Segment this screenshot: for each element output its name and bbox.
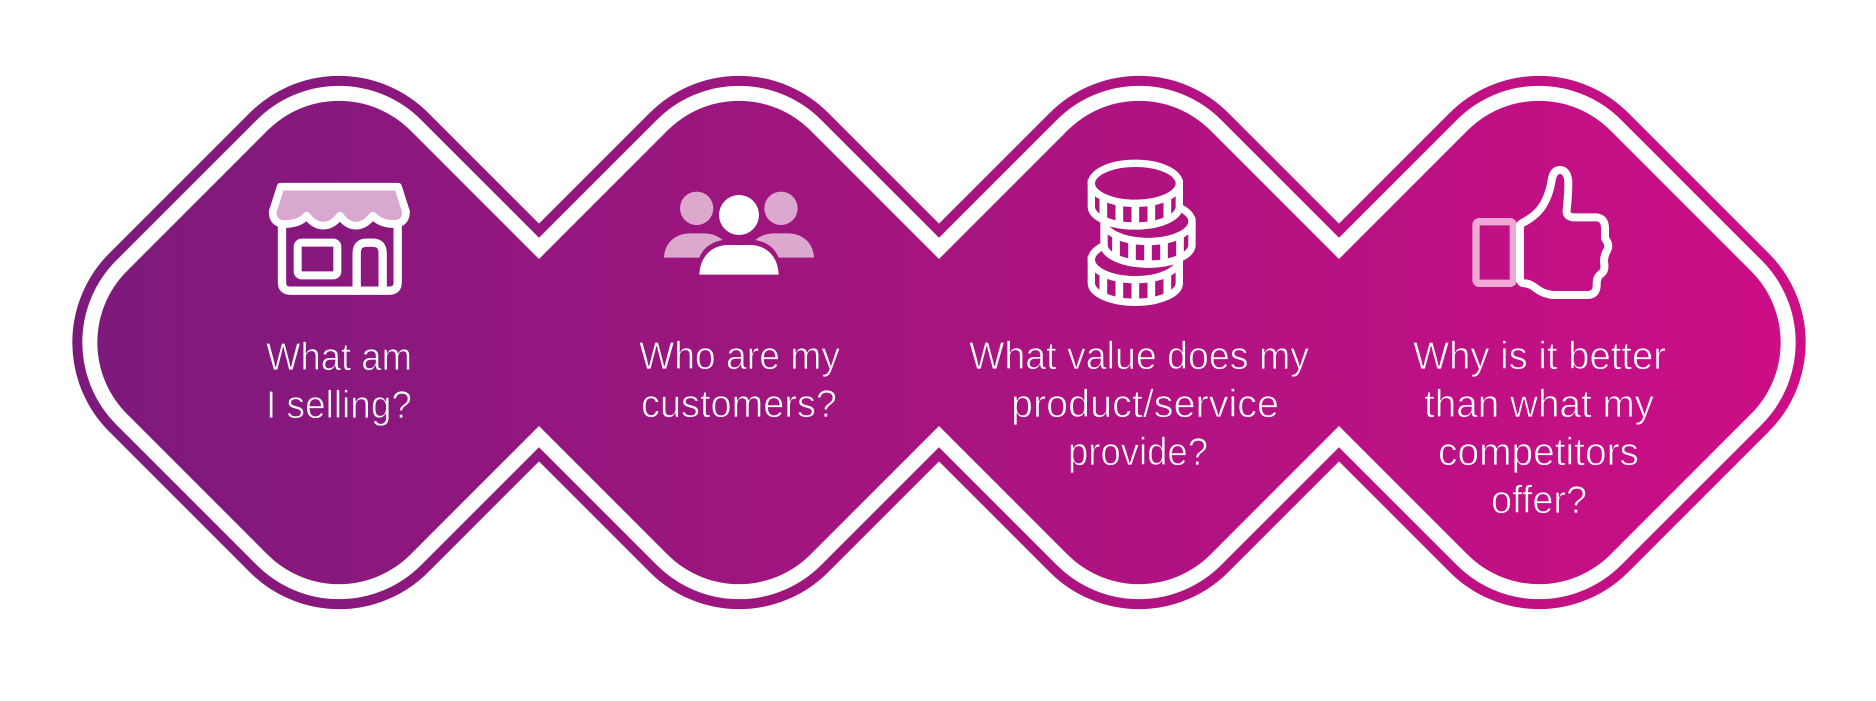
label: who are my customers: Who are my xyxy=(639,335,840,378)
outer outline ring xyxy=(77,81,1801,604)
label: who are my customers xyxy=(639,335,840,426)
label: why is it better: than what my xyxy=(1424,383,1654,426)
label: what value: provide? xyxy=(1068,431,1208,474)
icon: store xyxy=(273,187,406,291)
top coin xyxy=(1091,163,1179,226)
icon: coin stack xyxy=(1091,163,1192,302)
label: what am I selling: What am xyxy=(266,336,412,379)
icon: thumbs up xyxy=(1476,170,1608,295)
panel: who are my customers xyxy=(639,192,840,426)
label: what value: product/service xyxy=(1011,383,1279,426)
label: what am I selling: I selling? xyxy=(266,384,412,427)
label: what value: What value does my xyxy=(969,335,1309,378)
gradient filled chain of four diamonds xyxy=(97,101,1781,584)
label: why is it better xyxy=(1413,335,1666,522)
label: what am I selling xyxy=(266,336,412,427)
panel: what value xyxy=(969,163,1309,474)
label: what value xyxy=(969,335,1309,474)
panel: why is it better xyxy=(1413,170,1666,522)
bottom coin xyxy=(1091,240,1179,302)
label: who are my customers: customers? xyxy=(641,383,837,426)
label: why is it better: competitors xyxy=(1438,431,1639,474)
label: why is it better: offer? xyxy=(1491,479,1587,522)
label: why is it better: Why is it better xyxy=(1413,335,1666,378)
icon: people xyxy=(664,192,814,275)
panel: what am I selling xyxy=(266,187,412,427)
middle coin xyxy=(1104,201,1192,264)
